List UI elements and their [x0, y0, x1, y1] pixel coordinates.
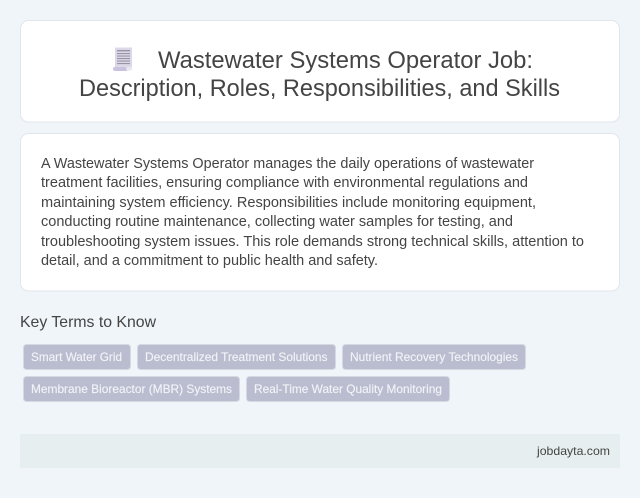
tag: decentralized treatment solutions: Decentralized Treatment Solutions: [145, 350, 328, 364]
panel: description card: [20, 134, 620, 291]
tag: membrane bioreactor systems: [24, 376, 240, 402]
tag: smart water grid: [24, 344, 130, 370]
title: [79, 47, 560, 102]
footer bar: jobdayta.com: [536, 444, 610, 458]
title: Wastewater Systems Operator Job:: [158, 47, 533, 74]
text block: description: detail, and a commitment to public health and safety.: [41, 253, 378, 269]
text block: description: A Wastewater Systems Operator manages the daily operations of wastewater: [41, 156, 534, 172]
tag: decentralized treatment solutions: [138, 344, 336, 370]
heading: key terms: Key Terms to Know: [20, 314, 156, 331]
tag: smart water grid: Smart Water Grid: [31, 350, 122, 364]
text block: description: troubleshooting system issues. This role demands strong technical skills, attention to: [41, 234, 584, 250]
tag: real-time water quality monitoring: Real-Time Water Quality Monitoring: [254, 382, 442, 396]
tag: nutrient recovery technologies: Nutrient Recovery Technologies: [350, 350, 518, 364]
panel: title card: [20, 20, 620, 122]
text block: description: [41, 156, 584, 269]
tag: nutrient recovery technologies: [342, 344, 526, 370]
title: Description, Roles, Responsibilities, and Skills: [79, 75, 560, 102]
icon: receipt: [113, 48, 132, 71]
footer bar: [20, 434, 620, 468]
text block: description: conducting routine maintenance, collecting water samples for testing, and: [41, 214, 513, 230]
text block: description: maintaining system efficiency. Responsibilities include monitoring equipment,: [41, 195, 536, 211]
text block: description: treatment facilities, ensuring compliance with environmental regulations and: [41, 175, 528, 191]
tag: real-time water quality monitoring: [246, 376, 450, 402]
tag: membrane bioreactor systems: Membrane Bioreactor (MBR) Systems: [31, 382, 232, 396]
